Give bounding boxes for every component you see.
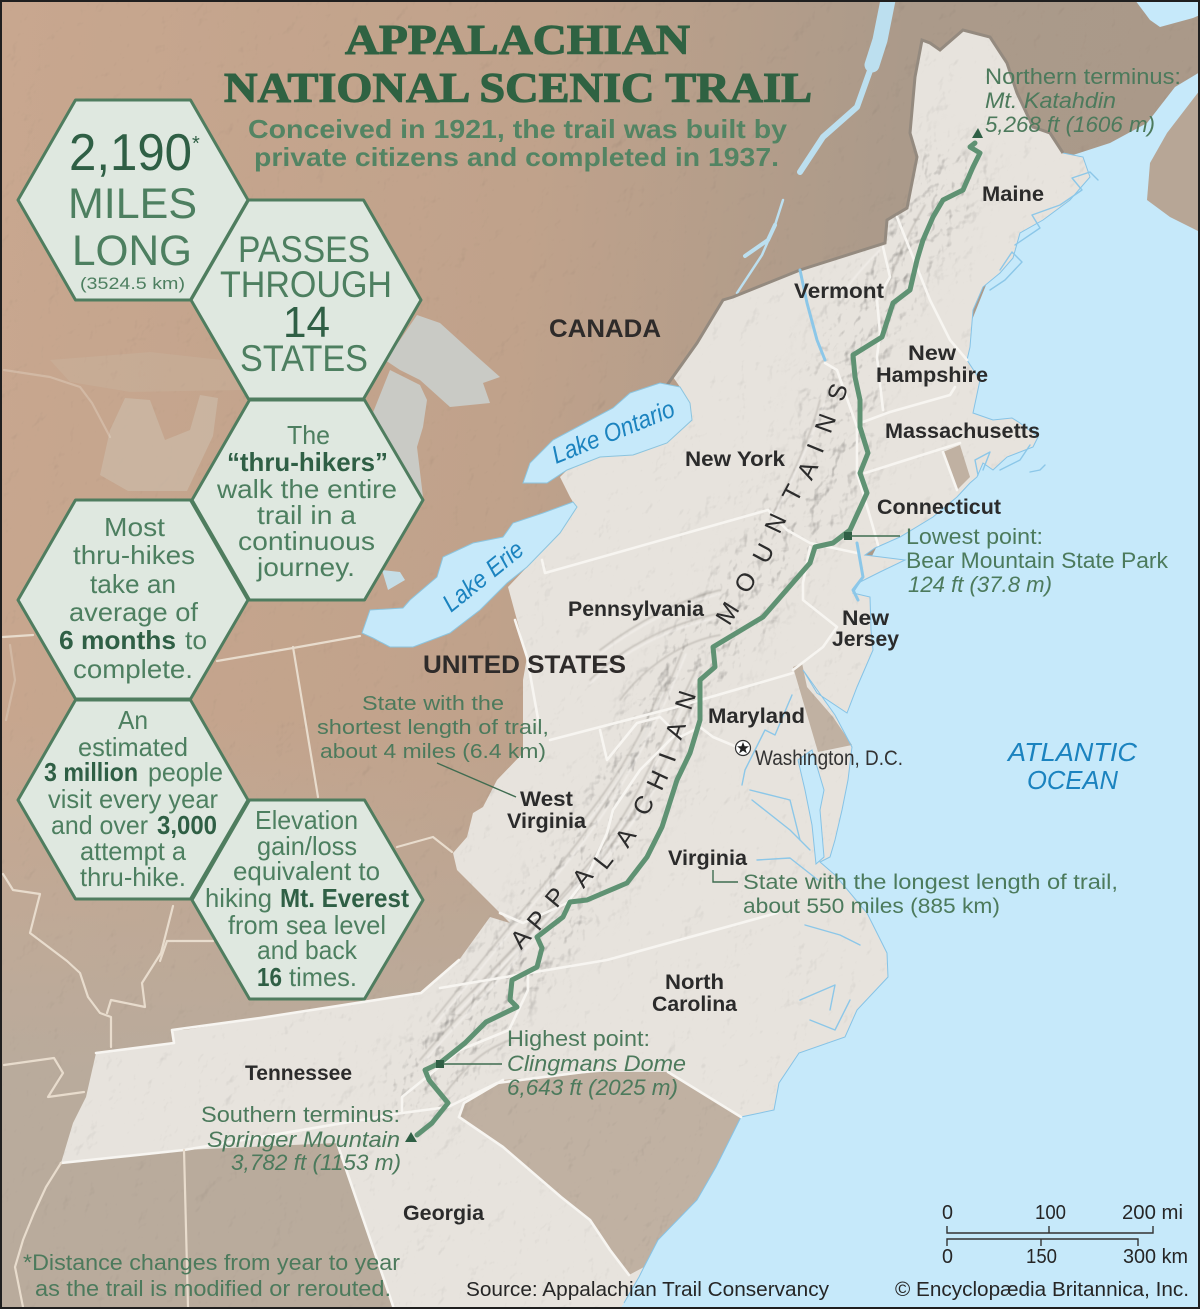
callout: lowest point: Lowest point:	[906, 524, 1043, 549]
hexagon: thru-hikers: journey.	[256, 552, 355, 582]
hexagon: fourteen states	[191, 200, 421, 399]
hexagon: elevation gain: from sea level	[228, 910, 386, 940]
hexagon: visitors: 3,000	[157, 810, 217, 840]
hexagon: thru-hikers: continuous	[238, 526, 375, 556]
hexagon: trail length: MILES	[68, 180, 197, 228]
hexagon: visitors: people	[148, 757, 223, 787]
callout: shortest length: shortest length of trail,	[317, 717, 549, 739]
copyright credit: © Encyclopædia Britannica, Inc.	[895, 1279, 1189, 1301]
label: Lake Erie: Lake Erie	[437, 535, 529, 618]
hexagon: visitors	[18, 700, 248, 899]
coastline outline	[624, 153, 1090, 1303]
label: Appalachian Mountains along the ridge: P	[522, 905, 554, 936]
hexagon: visitors: attempt a	[80, 836, 187, 866]
Appalachian Trail route line	[417, 143, 980, 1135]
callout: northern terminus: Mt. Katahdin	[985, 88, 1116, 113]
state borders	[61, 217, 967, 1309]
icon: Washington D.C. capital star	[736, 740, 750, 756]
callout: shortest length	[317, 693, 549, 797]
hexagon: thru-hikers: walk the entire	[216, 474, 397, 504]
label: Appalachian Mountains along the ridge: A	[792, 457, 824, 484]
Appalachian ridge lines	[420, 205, 925, 1100]
hexagon: thru-hikers: “thru-hikers”	[227, 447, 388, 477]
hexagon: trail length: LONG	[72, 227, 192, 275]
label: Washington, D.C.: Washington, D.C.	[755, 747, 903, 770]
callout: northern terminus	[972, 64, 1181, 138]
hexagon: visitors: An	[118, 705, 148, 735]
label: Appalachian Mountains along the ridge: U	[747, 539, 780, 568]
state labels	[245, 183, 1044, 1225]
callout: longest length	[713, 870, 1118, 918]
hexagon: elevation gain: times.	[289, 962, 357, 992]
title: NATIONAL SCENIC TRAIL	[224, 66, 812, 112]
hexagon: elevation gain: Elevation	[255, 805, 358, 835]
St Lawrence and northern rivers	[737, 0, 890, 293]
hexagon: six months: average of	[69, 597, 199, 627]
hexagon: six months: take an	[90, 569, 176, 599]
label: Appalachian Mountains along the ridge: I	[654, 749, 682, 765]
Bay of Fundy northern water	[1135, 0, 1200, 27]
callout: southern terminus: Springer Mountain	[207, 1127, 400, 1152]
state labels: Virginia	[668, 847, 747, 870]
label: Lake Ontario: Lake Ontario	[548, 395, 679, 470]
label: United States: UNITED STATES	[423, 651, 626, 679]
callout: highest point	[436, 1026, 686, 1100]
state labels: Pennsylvania	[568, 598, 704, 621]
hexagon: six months: Most	[104, 512, 166, 542]
scale bar: 0	[942, 1202, 953, 1224]
hexagon: visitors: thru-hike.	[80, 862, 186, 892]
state labels: Tennessee	[245, 1062, 352, 1085]
callout: longest length: State with the longest length of trail,	[743, 871, 1118, 894]
hexagon: elevation gain: and back	[257, 935, 358, 965]
label: Appalachian Mountains along the ridge: T	[777, 480, 809, 507]
coastal inlets and rivers	[742, 172, 1098, 1030]
label: Appalachian Mountains along the ridge: N	[810, 410, 842, 437]
callout: lowest point	[844, 524, 1169, 597]
state labels: Virginia	[507, 810, 586, 833]
state labels: Maryland	[708, 705, 805, 728]
label: Appalachian Mountains along the ridge: I	[802, 440, 830, 457]
hexagon: fourteen states: THROUGH	[220, 264, 392, 305]
hexagon: fourteen states: STATES	[240, 338, 368, 379]
label: Atlantic Ocean	[1006, 737, 1137, 795]
callout: southern terminus: Southern terminus:	[201, 1102, 400, 1127]
footnote: *Distance changes from year to year	[23, 1250, 400, 1275]
state labels: Jersey	[832, 628, 899, 651]
state labels: New York	[685, 448, 785, 471]
scale bar: 150	[1026, 1246, 1057, 1268]
hexagon: elevation gain	[192, 800, 423, 999]
state labels: New	[842, 607, 890, 630]
label: Appalachian Mountains along the ridge: A	[660, 718, 692, 743]
hexagon: trail length: 2,190	[69, 124, 192, 182]
hexagon: six months: to	[185, 625, 207, 655]
hexagon: visitors: and over	[51, 810, 148, 840]
label: Appalachian Mountains along the ridge: N	[759, 509, 792, 538]
title: APPALACHIAN	[345, 18, 690, 64]
label: Appalachian Mountains along the ridge: A	[505, 923, 537, 954]
state labels: North	[665, 971, 724, 994]
state labels: Connecticut	[877, 496, 1001, 519]
hexagon: elevation gain: hiking	[205, 883, 272, 913]
callout: southern terminus	[201, 1102, 417, 1175]
label: Appalachian Mountains along the ridge: N	[670, 687, 702, 713]
label: Appalachian Mountains along the ridge: P	[540, 882, 572, 913]
label: Atlantic Ocean: ATLANTIC	[1006, 737, 1137, 767]
state labels: Hampshire	[876, 364, 988, 387]
callout: highest point: 6,643 ft (2025 m)	[507, 1075, 678, 1100]
hexagon: thru-hikers	[192, 400, 423, 600]
callout: highest point: Clingmans Dome	[507, 1051, 686, 1076]
state labels: Maine	[982, 183, 1044, 206]
state labels: New	[908, 342, 957, 365]
subtitle	[248, 114, 788, 172]
label: Appalachian Mountains along the ridge: A	[567, 862, 599, 893]
callout: southern terminus: 3,782 ft (1153 m)	[231, 1150, 401, 1175]
hexagon: fourteen states: 14	[283, 298, 330, 347]
hexagon: six months: thru-hikes	[73, 540, 195, 570]
label: Appalachian Mountains along the ridge: O	[729, 567, 763, 598]
hexagon: trail length: (3524.5 km)	[80, 274, 185, 293]
scale bar: 300 km	[1123, 1246, 1188, 1268]
callout: longest length: about 550 miles (885 km)	[743, 895, 1000, 918]
hexagon: fourteen states: PASSES	[238, 229, 370, 270]
footnote: as the trail is modified or rerouted.	[35, 1276, 391, 1301]
Great Lakes Huron and Georgian Bay	[370, 315, 500, 590]
label: Canada: CANADA	[549, 315, 661, 343]
footnote	[23, 1250, 400, 1301]
hexagon: six months: complete.	[73, 654, 193, 684]
Lake Ontario	[523, 383, 692, 483]
scale bar: 0	[942, 1246, 953, 1268]
Canada border shadow	[660, 30, 1063, 395]
Lake Erie	[362, 502, 577, 647]
Chesapeake Bay	[798, 750, 824, 864]
callout: shortest length: about 4 miles (6.4 km)	[320, 741, 546, 763]
hexagon: six months: 6 months	[59, 625, 176, 655]
scale bar: 200 mi	[1122, 1202, 1183, 1224]
state labels: Vermont	[794, 280, 884, 303]
subtitle: Conceived in 1921, the trail was built by	[248, 114, 788, 144]
source credit: Source: Appalachian Trail Conservancy	[466, 1279, 829, 1301]
hexagon: six months	[18, 500, 248, 699]
callout: highest point: Highest point:	[507, 1026, 650, 1051]
label: Appalachian Mountains along the ridge: L	[588, 846, 619, 875]
borders in unhighlighted states	[3, 370, 452, 1307]
callout: northern terminus: Northern terminus:	[985, 64, 1181, 89]
state labels: West	[520, 788, 573, 811]
label: Appalachian Mountains along the ridge: A	[610, 823, 642, 852]
callout: shortest length: State with the	[362, 693, 504, 715]
hexagon: visitors: estimated	[78, 732, 188, 762]
hexagon: visitors: visit every year	[48, 784, 218, 814]
label: Appalachian Mountains along the ridge: S	[822, 380, 854, 405]
state labels: Carolina	[652, 993, 737, 1016]
hexagon: thru-hikers: The	[287, 420, 330, 450]
hexagon: elevation gain: 16	[257, 962, 282, 992]
hexagon: elevation gain: gain/loss	[257, 831, 357, 861]
callout: northern terminus: 5,268 ft (1606 m)	[985, 112, 1155, 137]
hexagon: trail length: *	[192, 133, 200, 155]
hexagon: visitors: 3 million	[44, 757, 138, 787]
scale bar: 100	[1035, 1202, 1066, 1224]
callout: lowest point: Bear Mountain State Park	[906, 548, 1169, 573]
Rhode Island, Delaware, South Carolina non-route states	[459, 445, 970, 1275]
subtitle: private citizens and completed in 1937.	[254, 142, 779, 172]
state labels: Georgia	[403, 1202, 484, 1225]
state labels: Massachusetts	[885, 420, 1040, 443]
scale bar	[942, 1202, 1188, 1268]
label: Atlantic Ocean: OCEAN	[1027, 765, 1118, 795]
hexagon: trail length	[18, 100, 248, 300]
label: Appalachian Mountains along the ridge: M	[710, 597, 745, 630]
hexagon: thru-hikers: trail in a	[257, 500, 357, 530]
label: Appalachian Mountains along the ridge: H	[641, 766, 674, 795]
callout: lowest point: 124 ft (37.8 m)	[908, 572, 1052, 597]
hexagon: elevation gain: equivalent to	[233, 856, 380, 886]
Atlantic Ocean water	[600, 72, 1200, 1309]
label: Appalachian Mountains along the ridge: C	[627, 791, 661, 820]
hexagon: elevation gain: Mt. Everest	[280, 883, 409, 913]
faint western Great Lakes	[50, 352, 240, 491]
hillshade relief over states	[74, 58, 1084, 1304]
Nova Scotia	[1147, 90, 1200, 232]
title	[224, 18, 812, 112]
label: Appalachian Mountains along the ridge	[505, 380, 854, 954]
